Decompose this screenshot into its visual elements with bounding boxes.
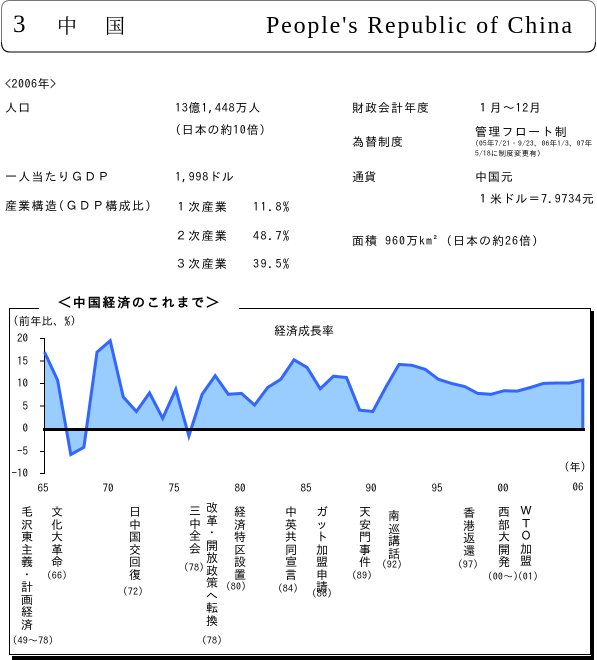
title Japanese character 1: 中 xyxy=(57,10,77,39)
event year 00: (00～) xyxy=(488,572,518,582)
event: WTO accession: ＷＴＯ加盟 xyxy=(520,505,532,567)
panel: economic history chart xyxy=(9,296,594,660)
event year 84: (84) xyxy=(278,584,298,594)
profile data block xyxy=(5,102,595,270)
GDP per capita label: 一人当たりＧＤＰ xyxy=(5,171,111,183)
event: Hong Kong return: 香港返還 xyxy=(463,507,475,556)
fiscal year value: １月～12月 xyxy=(477,102,542,114)
exchange system note: 5/18に制度変更有) xyxy=(475,149,541,157)
event year 66: (66) xyxy=(47,571,67,581)
industry structure label: 産業構造(ＧＤＰ構成比) xyxy=(5,200,153,212)
exchange rate: １米ドル＝7.9734元 xyxy=(477,193,595,205)
fiscal year label: 財政会計年度 xyxy=(352,102,430,114)
event year 86: (86) xyxy=(312,589,332,599)
population label: 人口 xyxy=(5,102,31,114)
exchange system label: 為替制度 xyxy=(352,136,404,148)
title English name: People's Republic of China xyxy=(266,13,572,39)
event: Mao socialism and planned economy: 毛沢東主義・計画経済 xyxy=(21,506,33,630)
event: reform and opening: 改革・開放政策へ転換 xyxy=(206,502,218,626)
y axis labels: -10 xyxy=(12,468,28,479)
y axis labels: 5 xyxy=(22,401,28,412)
panel heading: ＜中国経済のこれまで＞ xyxy=(58,296,221,309)
population comparison: (日本の約10倍) xyxy=(175,124,266,136)
y axis labels xyxy=(12,333,28,479)
event year 92: (92) xyxy=(382,560,402,570)
year note: <2006年> xyxy=(5,78,56,90)
exchange system value: 管理フロート制 xyxy=(475,126,568,138)
currency label: 通貨 xyxy=(352,171,376,183)
event: Cultural Revolution: 文化大革命 xyxy=(51,506,63,568)
event year 72: (72) xyxy=(123,587,143,597)
banner rounded border xyxy=(1,0,596,52)
secondary industry share: 48.7% xyxy=(253,230,290,242)
event year 89: (89) xyxy=(352,571,372,581)
tertiary industry: ３次産業 xyxy=(175,258,228,270)
event year 78 reform: (78) xyxy=(202,636,222,646)
event: western development: 西部大開発 xyxy=(498,506,510,568)
primary industry: １次産業 xyxy=(175,201,228,213)
event year 97: (97) xyxy=(458,560,478,570)
y axis labels: 10 xyxy=(17,378,28,389)
x axis labels: 75 xyxy=(168,483,180,494)
event: Third Plenum: 三中全会 xyxy=(189,505,201,554)
GDP per capita value: 1,998ドル xyxy=(175,171,235,183)
population value: 13億1,448万人 xyxy=(175,102,261,114)
primary industry share: 11.8% xyxy=(253,201,290,213)
x axis labels: 00 xyxy=(498,483,508,494)
timeline: historical events xyxy=(12,502,538,646)
x axis labels: 06 xyxy=(572,482,584,493)
chart title: 経済成長率 xyxy=(274,325,334,337)
y axis unit: (前年比、%) xyxy=(13,316,76,327)
secondary industry: ２次産業 xyxy=(175,230,228,242)
x axis labels: 95 xyxy=(432,483,442,494)
event year 01: (01) xyxy=(518,572,538,582)
event years 49-78: (49～78) xyxy=(12,636,54,646)
event year 80: (80) xyxy=(226,582,246,592)
event: Tiananmen: 天安門事件 xyxy=(359,506,371,568)
title Japanese character 2: 国 xyxy=(105,10,125,39)
panel frame and shadow xyxy=(9,308,594,660)
event year 78: (78) xyxy=(184,563,204,573)
y axis labels: -5 xyxy=(17,446,28,457)
event: Sino-British declaration: 中英共同宣言 xyxy=(285,506,297,580)
exchange system note xyxy=(475,139,592,157)
x axis labels xyxy=(38,462,586,494)
currency value: 中国元 xyxy=(475,171,513,183)
x axis labels: 90 xyxy=(366,483,376,494)
tertiary industry share: 39.5% xyxy=(253,258,290,270)
y axis labels: 20 xyxy=(17,333,28,344)
area: 面積 960万km²（日本の約26倍） xyxy=(352,235,545,247)
event: Japan-China normalization: 日中国交回復 xyxy=(129,506,141,580)
x axis labels: (年) xyxy=(564,462,586,473)
y axis labels: 0 xyxy=(22,423,28,434)
x axis labels: 85 xyxy=(300,483,312,494)
x axis labels: 80 xyxy=(234,483,246,494)
exchange system note: (05年7/21・9/23、06年1/3、07年 xyxy=(475,139,592,147)
event: GATT application: ガット加盟申請 xyxy=(316,506,328,593)
x axis labels: 65 xyxy=(38,483,48,494)
y axis labels: 15 xyxy=(17,356,28,367)
event: special economic zones: 経済特区設置 xyxy=(234,506,246,580)
event: southern tour: 南巡講話 xyxy=(388,510,400,560)
title number: 3 xyxy=(13,11,26,38)
title banner xyxy=(1,0,596,52)
x axis labels: 70 xyxy=(102,483,114,494)
